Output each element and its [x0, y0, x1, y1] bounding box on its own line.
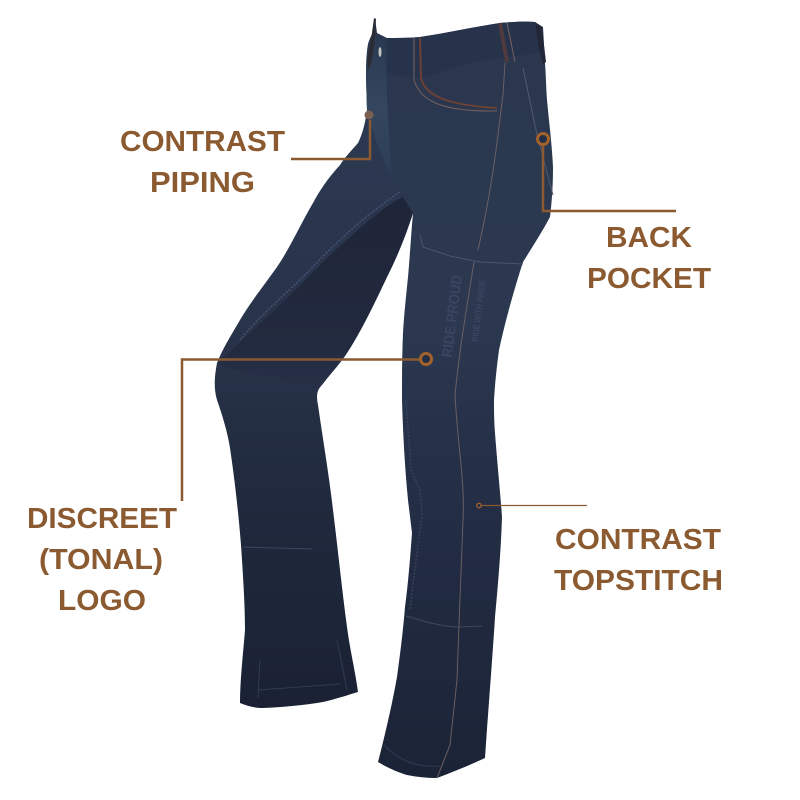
- contrast piping: front pocket: [420, 38, 497, 108]
- callout: discreet tonal logo: [27, 354, 432, 617]
- trousers: [215, 18, 553, 778]
- leader dot: [364, 110, 374, 120]
- front leg knee seam: [406, 616, 482, 627]
- callout: contrast piping: [120, 110, 374, 199]
- back leg: [215, 110, 420, 708]
- dark knee patch: [218, 197, 413, 387]
- inner leg stitching: [406, 400, 422, 610]
- leader dot: [538, 134, 548, 144]
- belt loop: right: [535, 22, 546, 64]
- side seam topstitch: [437, 63, 505, 778]
- tonal logo: RIDE WITH PRIDE: [470, 279, 488, 342]
- cargo pocket: [420, 235, 523, 264]
- tonal logo: RIDE PROUD: [439, 274, 466, 358]
- label: back pocket: POCKET: [587, 263, 711, 295]
- label: back pocket: [587, 222, 711, 295]
- label: contrast topstitch: [554, 524, 723, 597]
- seat seam: [523, 68, 553, 195]
- label: contrast topstitch: CONTRAST: [555, 524, 721, 556]
- leader line: [291, 120, 370, 159]
- button: [378, 47, 382, 57]
- label: contrast topstitch: TOPSTITCH: [554, 565, 723, 597]
- belt loop: stitched rear: [500, 23, 507, 62]
- callout: back pocket: [538, 134, 711, 295]
- belt loop: fly: [367, 18, 376, 70]
- label: contrast piping: CONTRAST: [120, 126, 285, 158]
- front leg: [366, 18, 553, 778]
- leader line: [543, 146, 676, 211]
- label: back pocket: BACK: [606, 222, 692, 254]
- label: contrast piping: PIPING: [150, 167, 255, 199]
- leader line: [182, 360, 419, 501]
- leader dot: [477, 503, 481, 508]
- leader line: [481, 504, 587, 506]
- tonal logo: [439, 274, 488, 358]
- waistband: [387, 22, 543, 78]
- label: discreet tonal logo: DISCREET: [27, 503, 177, 535]
- back leg knee seam: [243, 547, 312, 549]
- leader dot: [420, 354, 432, 364]
- label: discreet tonal logo: (TONAL): [39, 544, 163, 576]
- front hem stitching: [384, 745, 440, 766]
- back hem stitching: [258, 640, 347, 698]
- label: discreet tonal logo: LOGO: [58, 585, 146, 617]
- fly and front panel: [366, 38, 392, 180]
- label: contrast piping: [120, 126, 285, 199]
- label: discreet tonal logo: [27, 503, 177, 617]
- callout: contrast topstitch: [477, 503, 723, 597]
- thigh seam: [240, 192, 400, 340]
